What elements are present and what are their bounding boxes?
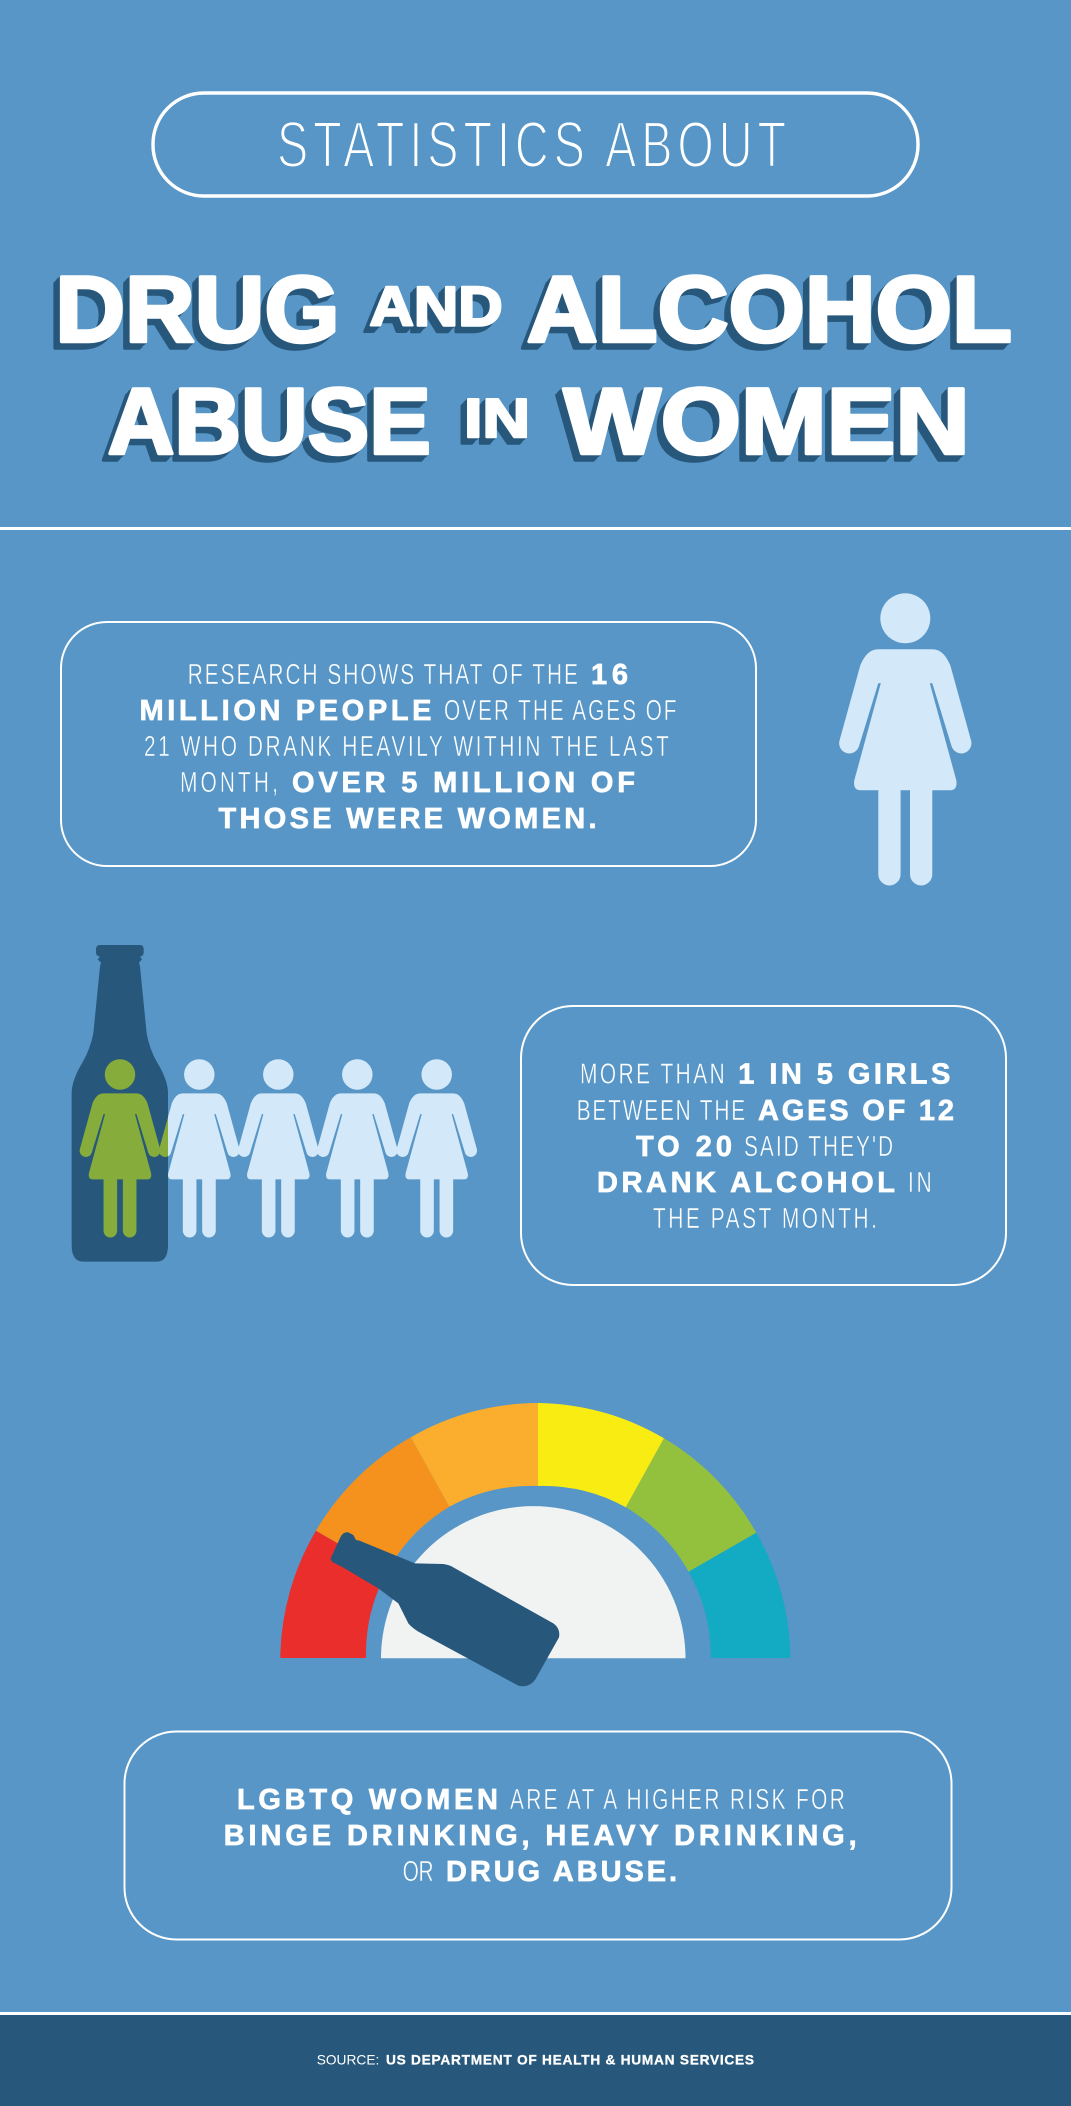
title: drug and alcohol abuse in women: IN <box>464 388 530 449</box>
panel: 1 in 5 girls statistic <box>521 1006 1006 1285</box>
title: drug and alcohol abuse in women <box>55 256 1012 473</box>
gauge: white dial <box>381 1506 686 1658</box>
panel: 1 in 5 girls statistic: THE PAST MONTH. <box>653 1203 877 1235</box>
panel: 16 million statistic: MILLION PEOPLE <box>140 695 432 727</box>
green woman in bottle <box>80 1059 168 1238</box>
panel: 1 in 5 girls statistic: BETWEEN THE <box>577 1095 745 1127</box>
panel: 1 in 5 girls statistic: MORE THAN <box>580 1058 725 1090</box>
panel: 1 in 5 girls statistic: TO 20 <box>636 1131 732 1163</box>
gauge chart with bottle needle <box>280 1403 790 1686</box>
panel: LGBTQ women statistic <box>124 1732 952 1940</box>
gauge: green segment <box>626 1438 756 1572</box>
title: drug and alcohol abuse in women: ALCOHOL <box>527 256 1012 362</box>
light women <box>159 1059 477 1237</box>
panel: 16 million statistic: OVER THE AGES OF <box>444 695 677 727</box>
panel: 16 million statistic: OVER 5 MILLION OF <box>292 767 635 799</box>
gauge: yellow segment <box>538 1403 664 1507</box>
panel: LGBTQ women statistic: ARE AT A HIGHER RISK FOR <box>510 1784 845 1816</box>
gauge: light orange segment <box>411 1403 538 1507</box>
icon group: bottle with five women <box>72 945 477 1262</box>
gauge: teal segment <box>689 1533 790 1658</box>
panel: 1 in 5 girls statistic: DRANK ALCOHOL <box>597 1167 895 1199</box>
panel: 16 million statistic: 21 WHO DRANK HEAVILY WITHIN THE LAST <box>144 731 669 763</box>
panel: LGBTQ women statistic: LGBTQ WOMEN <box>237 1784 498 1816</box>
source text: US DEPARTMENT OF HEALTH & HUMAN SERVICES <box>386 2052 754 2067</box>
panel: LGBTQ women statistic: DRUG ABUSE. <box>446 1856 677 1888</box>
panel: 1 in 5 girls statistic: 1 IN 5 GIRLS <box>738 1058 950 1090</box>
bottle <box>72 945 168 1262</box>
footer band <box>0 2012 1071 2106</box>
icon: woman <box>839 593 971 885</box>
panel: 16 million statistic: RESEARCH SHOWS THAT OF THE <box>188 659 578 691</box>
header pill: statistics about <box>153 93 918 196</box>
panel: 1 in 5 girls statistic: AGES OF 12 <box>758 1095 954 1127</box>
title: drug and alcohol abuse in women: AND <box>370 274 503 338</box>
title: drug and alcohol abuse in women: WOMEN <box>564 368 970 473</box>
panel: 16 million statistic <box>61 622 756 866</box>
panel: 16 million statistic: 16 <box>591 659 628 691</box>
panel: LGBTQ women statistic: BINGE DRINKING, HEAVY DRINKING, <box>224 1820 857 1852</box>
gauge: red segment <box>280 1531 387 1658</box>
source text: SOURCE: <box>317 2052 379 2067</box>
panel: 16 million statistic: THOSE WERE WOMEN. <box>218 803 596 835</box>
gauge: orange segment <box>316 1437 449 1572</box>
header pill: statistics about: STATISTICS ABOUT <box>277 110 786 182</box>
title: drug and alcohol abuse in women: DRUG <box>55 256 340 362</box>
panel: 1 in 5 girls statistic: SAID THEY'D <box>744 1131 893 1163</box>
panel: 16 million statistic: MONTH, <box>180 767 278 799</box>
panel: 1 in 5 girls statistic: IN <box>908 1167 932 1199</box>
icon: bottle needle <box>331 1532 559 1686</box>
title: drug and alcohol abuse in women: ABUSE <box>108 368 431 473</box>
panel: LGBTQ women statistic: OR <box>403 1856 434 1888</box>
